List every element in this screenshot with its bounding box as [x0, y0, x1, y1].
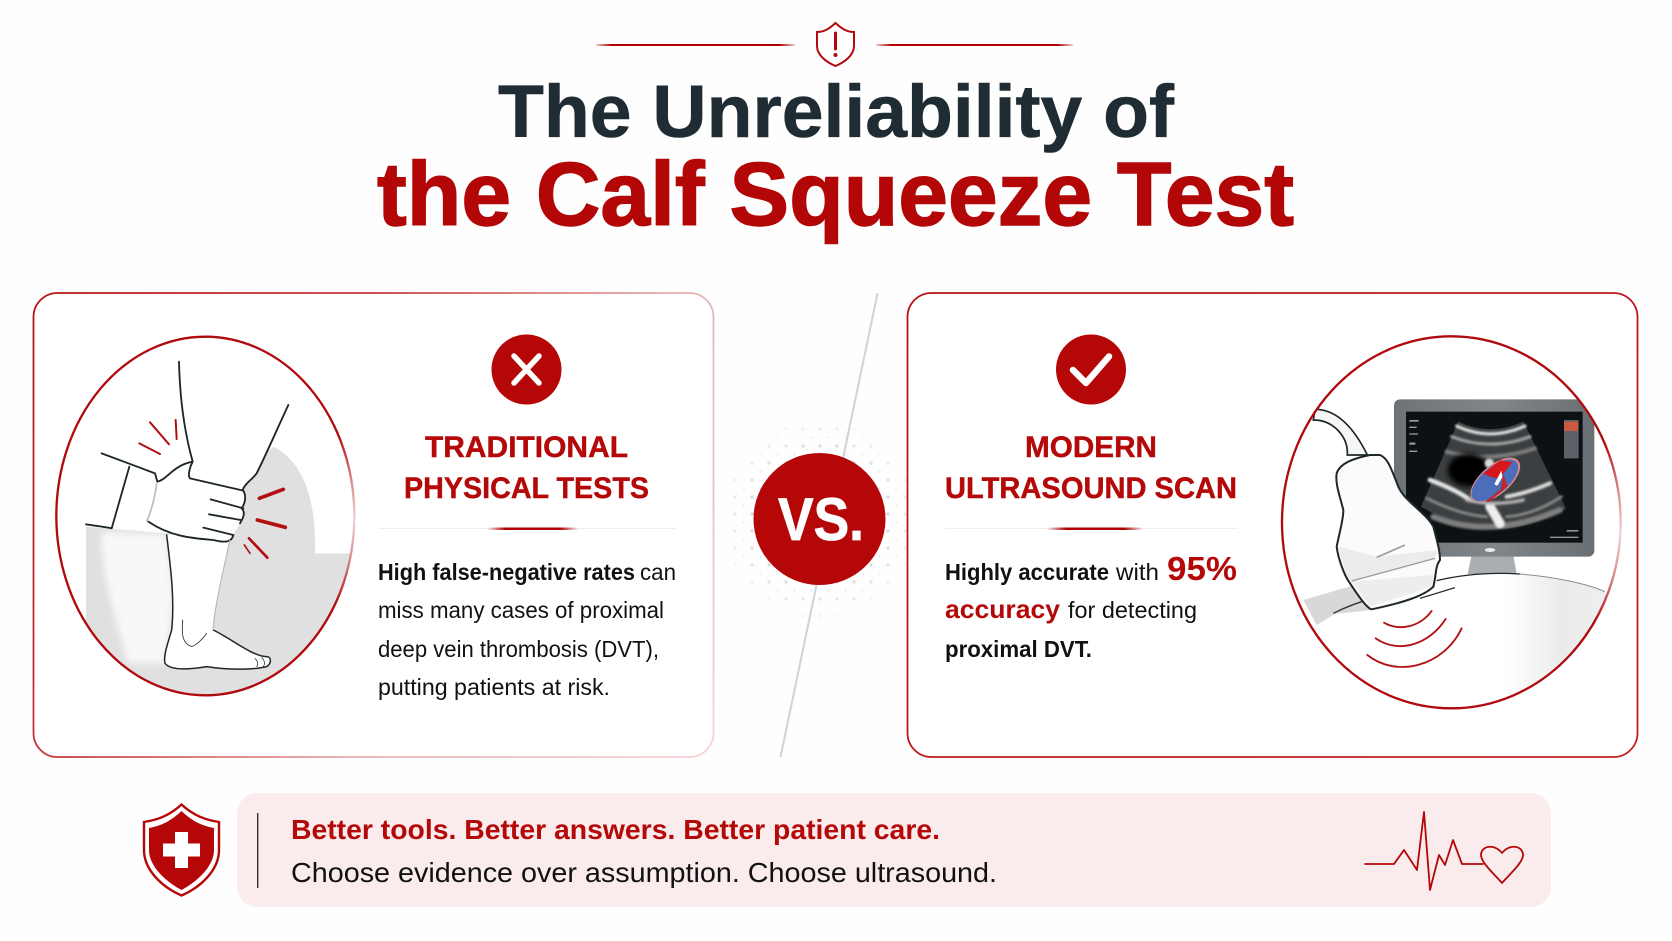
icon: x mark: [492, 334, 562, 404]
panel: modern ultrasound scan: [908, 293, 1638, 757]
title: the Calf Squeeze Test: [377, 145, 1294, 245]
vs badge: [726, 428, 914, 616]
body text: ultrasound: with: [1115, 559, 1159, 585]
monitor: [1394, 399, 1594, 574]
body text: ultrasound: proximal DVT.: [945, 636, 1092, 662]
probe: [1336, 455, 1440, 609]
illustration: ultrasound probe and monitor: [1282, 336, 1627, 720]
heading: traditional physical tests: PHYSICAL TESTS: [404, 472, 649, 505]
diagonal divider: [780, 293, 878, 757]
heading: modern ultrasound scan: [945, 431, 1237, 505]
body text: traditional tests: deep vein thrombosis (DVT),: [378, 636, 659, 662]
body text: ultrasound: accuracy: [945, 594, 1061, 624]
body text: traditional tests: miss many cases of proximal: [378, 597, 664, 623]
illustration: hand squeezing calf: [56, 337, 357, 700]
footer text: Better tools. Better answers. Better patient care.: [291, 814, 940, 845]
title: The Unreliability of: [498, 70, 1174, 153]
red pain marks: [139, 420, 285, 558]
heading: traditional physical tests: [404, 431, 649, 505]
body text: traditional tests: can: [640, 559, 676, 585]
title: [377, 70, 1294, 245]
body text: ultrasound: [945, 550, 1237, 662]
icon: medical shield: [144, 804, 219, 896]
body text: traditional tests: [378, 559, 676, 700]
body text: traditional tests: putting patients at risk.: [378, 674, 610, 700]
footer text: [291, 814, 997, 888]
sound waves: [1367, 611, 1462, 667]
body text: ultrasound: 95%: [1167, 550, 1237, 587]
icon: heartbeat with heart: [1365, 812, 1523, 890]
skin: [1529, 576, 1606, 686]
doppler flow: [1470, 458, 1520, 502]
footer text: Choose evidence over assumption. Choose ultrasound.: [291, 857, 997, 888]
heading: modern ultrasound scan: MODERN: [1025, 431, 1157, 464]
body text: ultrasound: Highly accurate: [945, 559, 1109, 585]
heading: traditional physical tests: TRADITIONAL: [425, 431, 628, 464]
top shield ornament: [596, 23, 1073, 66]
vs badge: VS.: [778, 486, 864, 553]
icon: check mark: [1056, 334, 1126, 404]
body text: ultrasound: for detecting: [1068, 597, 1197, 623]
panel: traditional physical tests: [34, 293, 714, 757]
footer banner: [144, 793, 1551, 907]
body text: traditional tests: High false-negative rates: [378, 559, 635, 585]
heading: modern ultrasound scan: ULTRASOUND SCAN: [945, 472, 1237, 505]
cable: [1313, 409, 1367, 455]
